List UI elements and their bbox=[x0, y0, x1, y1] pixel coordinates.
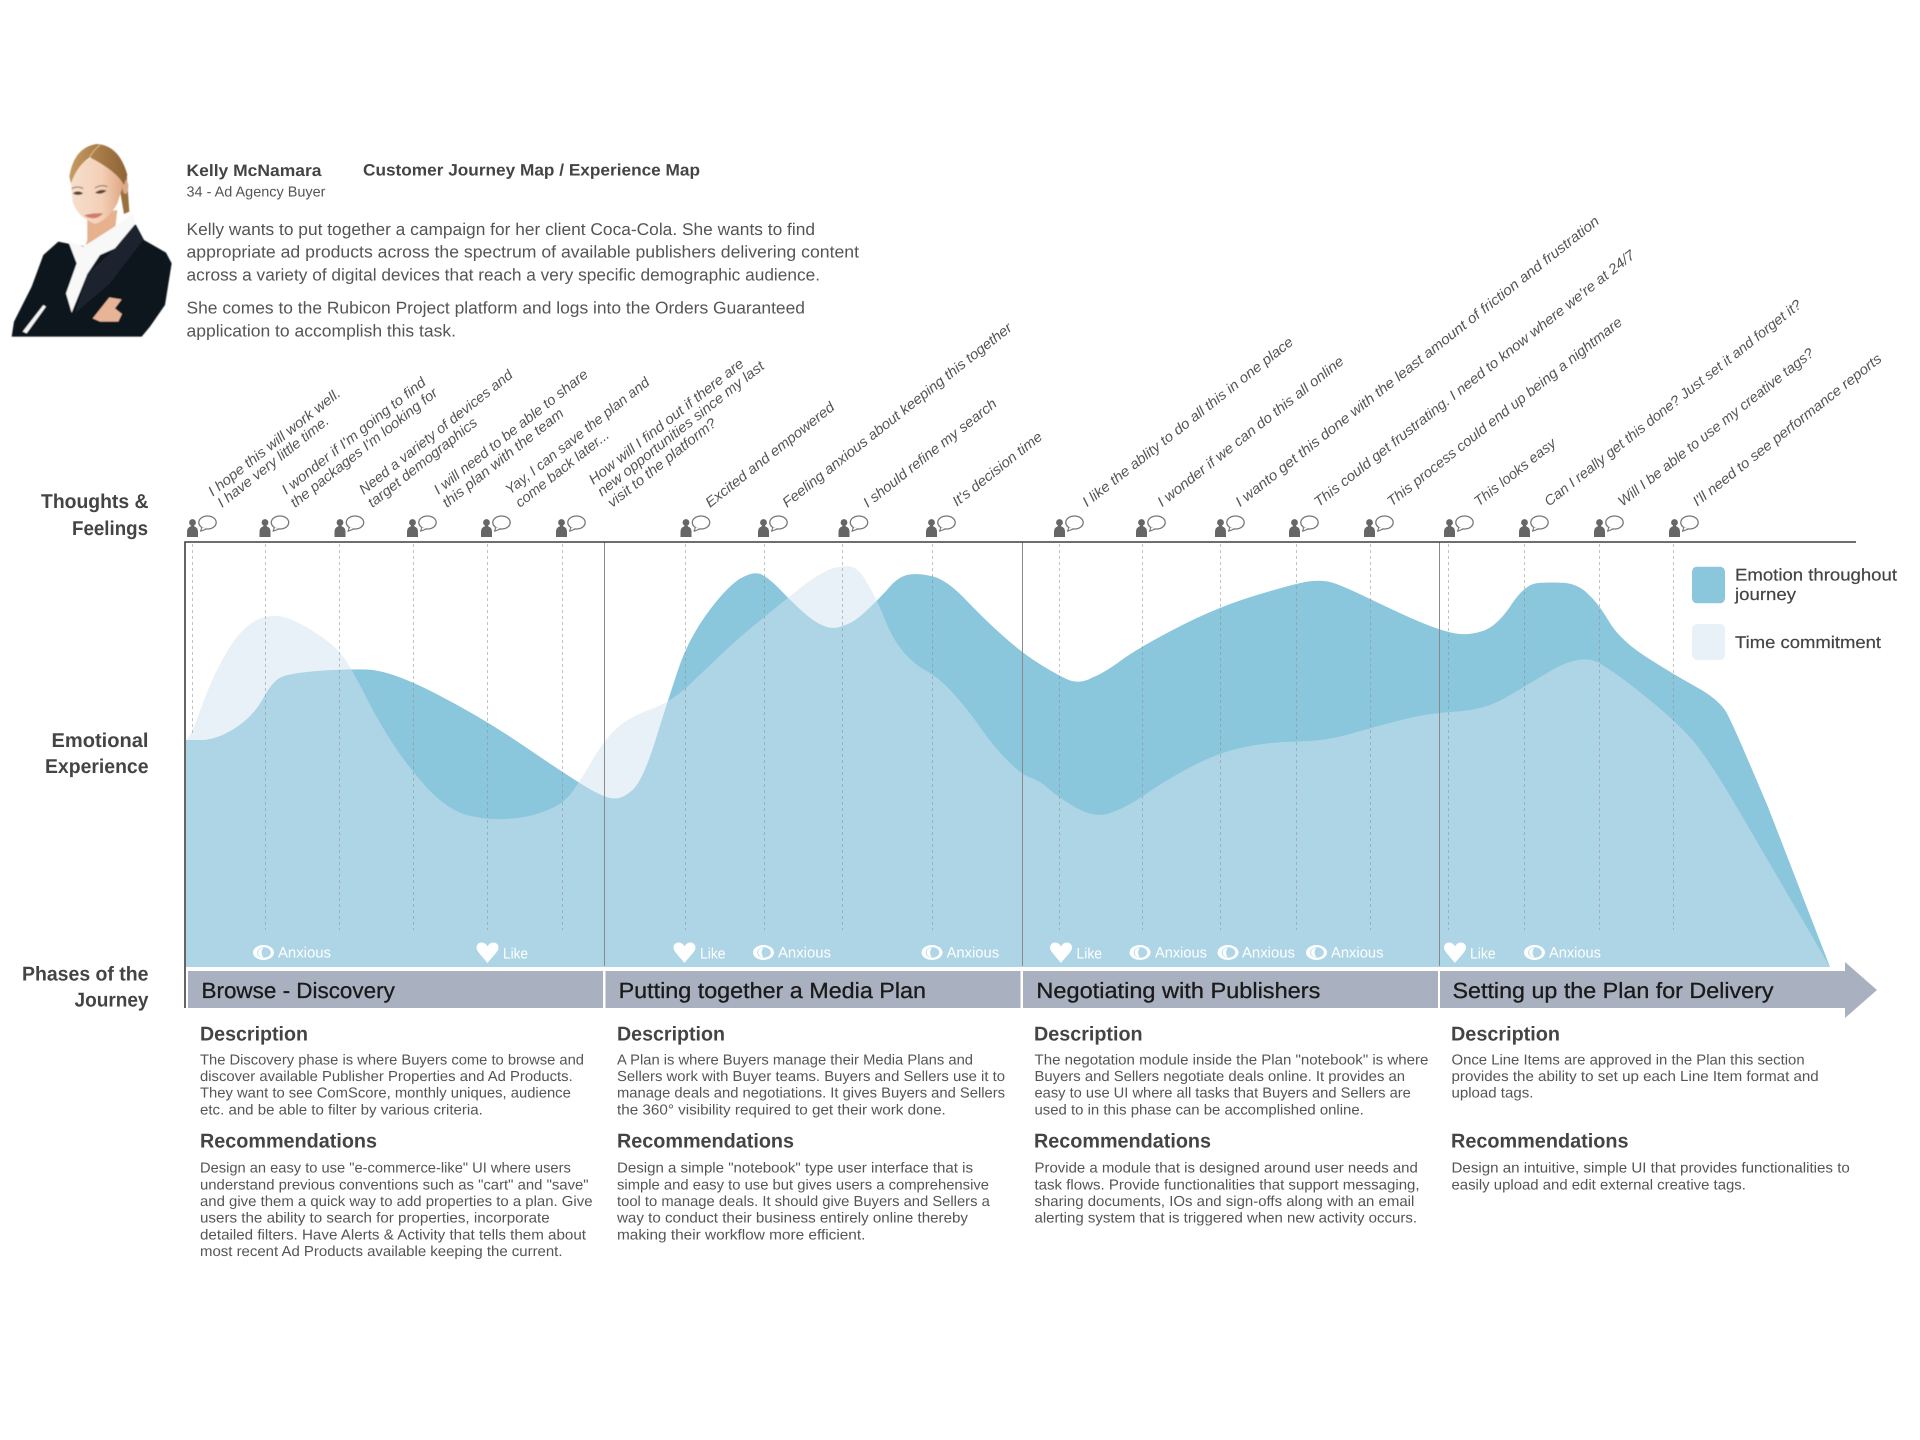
column: negotiating details: The negotation module inside the Plan "notebook" is where bbox=[1034, 1052, 1428, 1068]
rotated thoughts and feelings statements: Feeling anxious about keeping this together bbox=[780, 319, 1017, 511]
column: media plan details: Recommendations bbox=[617, 1130, 794, 1152]
row label: thoughts and feelings: Feelings bbox=[72, 518, 148, 540]
column: delivery details: Recommendations bbox=[1451, 1130, 1628, 1152]
rotated thoughts and feelings statements: the packages I'm looking for bbox=[288, 384, 442, 511]
phase: browse: Browse - Discovery bbox=[202, 978, 395, 1003]
rotated thoughts and feelings statements: I wonder if I'm going to find bbox=[279, 374, 430, 498]
rotated thoughts and feelings statements: Can I really get this done? Just set it and forget it? bbox=[1542, 297, 1805, 510]
emotion markers along the chart base: Anxious bbox=[1242, 945, 1295, 962]
row label: thoughts and feelings bbox=[41, 491, 148, 540]
column: browse discovery details: and give them a quick way to add properties to a plan. Give bbox=[200, 1194, 592, 1210]
column: media plan details: making their workflow more efficient. bbox=[617, 1227, 865, 1243]
column: browse discovery details: etc. and be able to filter by various criteria. bbox=[200, 1102, 483, 1118]
column: negotiating details: Buyers and Sellers negotiate deals online. It provides an bbox=[1034, 1069, 1405, 1085]
rotated thoughts and feelings statements: I hope this will work well. bbox=[205, 386, 344, 500]
phase dividers bbox=[604, 542, 1440, 966]
column: delivery details: upload tags. bbox=[1452, 1086, 1533, 1102]
column: delivery details: Design an intuitive, simple UI that provides functionalities to bbox=[1452, 1161, 1850, 1177]
rotated thoughts and feelings statements: It's decision time bbox=[950, 429, 1046, 510]
column: browse discovery details: users the ability to search for properties, incorporate bbox=[200, 1211, 550, 1227]
row label: phases of the journey bbox=[22, 964, 149, 1012]
phase bar with arrow bbox=[188, 962, 1877, 1018]
row label: thoughts and feelings: Thoughts & bbox=[41, 491, 148, 513]
row label: emotional experience: Experience bbox=[45, 756, 148, 778]
persona scenario text: appropriate ad products across the spectrum of available publishers delivering content bbox=[186, 243, 859, 262]
persona scenario text: She comes to the Rubicon Project platform and logs into the Orders Guaranteed bbox=[186, 299, 805, 318]
phase: negotiating: Negotiating with Publishers bbox=[1036, 978, 1320, 1003]
emotion markers along the chart base: Like bbox=[700, 946, 726, 962]
emotion markers along the chart base bbox=[253, 942, 1601, 963]
emotion markers along the chart base: Anxious bbox=[778, 945, 831, 962]
column: negotiating details: task flows. Provide functionalities that support messaging, bbox=[1034, 1177, 1420, 1193]
column: browse discovery details bbox=[200, 1024, 592, 1260]
emotion markers along the chart base: Anxious bbox=[278, 945, 331, 962]
row label: phases of the journey: Phases of the bbox=[22, 964, 148, 986]
persona scenario text: application to accomplish this task. bbox=[186, 322, 456, 341]
persona scenario text bbox=[186, 220, 859, 341]
legend swatch: time commitment bbox=[1692, 624, 1725, 660]
rotated thoughts and feelings statements: I will need to be able to share bbox=[431, 367, 592, 498]
rotated thoughts and feelings statements: I'll need to see performance reports bbox=[1690, 351, 1885, 510]
column: negotiating details: alerting system that is triggered when new activity occurs. bbox=[1034, 1211, 1417, 1227]
column: browse discovery details: Design an easy to use "e-commerce-like" UI where users bbox=[200, 1161, 571, 1177]
rotated thoughts and feelings statements: new opportunities since my last bbox=[595, 358, 769, 500]
rotated thoughts and feelings statements: target demographics bbox=[365, 415, 481, 511]
rotated thoughts and feelings statements: Yay, I can save the plan and bbox=[503, 374, 654, 498]
column: delivery details: Once Line Items are approved in the Plan this section bbox=[1452, 1052, 1805, 1068]
rotated thoughts and feelings statements: I wanto get this done with the least amount of friction and frustration bbox=[1233, 213, 1603, 510]
time commitment area bbox=[186, 566, 1830, 967]
column: negotiating details: Description bbox=[1034, 1024, 1143, 1046]
column: media plan details: Design a simple "notebook" type user interface that is bbox=[617, 1161, 973, 1177]
emotion markers along the chart base: Anxious bbox=[947, 945, 999, 962]
rotated thoughts and feelings statements: Need a variety of devices and bbox=[356, 367, 517, 498]
legend swatch: emotion bbox=[1692, 567, 1725, 603]
rotated thoughts and feelings statements: This process could end up being a nightmare bbox=[1384, 314, 1626, 510]
column: browse discovery details: Description bbox=[200, 1024, 308, 1046]
touchpoint guide lines bbox=[192, 544, 1674, 930]
emotion area chart bbox=[185, 542, 1856, 1008]
rotated thoughts and feelings statements: I should refine my search bbox=[860, 396, 1000, 511]
legend text: emotion bbox=[1734, 566, 1897, 604]
title: Customer Journey Map / Experience Map bbox=[363, 162, 700, 180]
column: negotiating details: easy to use UI where all tasks that Buyers and Sellers are bbox=[1034, 1086, 1411, 1102]
rotated thoughts and feelings statements bbox=[205, 213, 1885, 511]
row label: phases of the journey: Journey bbox=[74, 990, 149, 1012]
column: browse discovery details: Recommendations bbox=[200, 1130, 377, 1152]
rotated thoughts and feelings statements: This looks easy bbox=[1471, 435, 1560, 510]
emotion markers along the chart base: Like bbox=[503, 946, 528, 962]
rotated thoughts and feelings statements: come back later... bbox=[513, 427, 613, 511]
legend text: time commitment: Time commitment bbox=[1735, 633, 1881, 652]
legend text: emotion: journey bbox=[1734, 585, 1797, 604]
phase: delivery with arrow head: Setting up the Plan for Delivery bbox=[1452, 978, 1774, 1003]
rotated thoughts and feelings statements: visit to the platform? bbox=[605, 415, 720, 511]
phase: media plan: Putting together a Media Plan bbox=[619, 978, 926, 1003]
rotated thoughts and feelings statements: I have very little time. bbox=[215, 413, 332, 511]
persona scenario text: Kelly wants to put together a campaign for her client Coca-Cola. She wants to find bbox=[186, 220, 815, 239]
emotion markers along the chart base: Like bbox=[1470, 946, 1496, 962]
column: negotiating details: used to in this phase can be accomplished online. bbox=[1034, 1102, 1364, 1118]
column: delivery details: Description bbox=[1451, 1024, 1560, 1046]
column: browse discovery details: detailed filters. Have Alerts & Activity that tells them about bbox=[200, 1227, 586, 1243]
rotated thoughts and feelings statements: I wonder if we can do this all online bbox=[1155, 353, 1347, 510]
column: media plan details: Description bbox=[617, 1024, 725, 1046]
emotion markers along the chart base: Anxious bbox=[1155, 945, 1207, 962]
phase: negotiating bbox=[1023, 971, 1438, 1008]
column: delivery details: provides the ability to set up each Line Item format and bbox=[1452, 1069, 1819, 1085]
column: media plan details: way to conduct their business entirely online thereby bbox=[616, 1211, 969, 1227]
rotated thoughts and feelings statements: I like the ablity to do all this in one place bbox=[1080, 334, 1297, 510]
chart axes bbox=[185, 542, 1856, 1008]
header: persona name: Kelly McNamara bbox=[186, 162, 322, 180]
rotated thoughts and feelings statements: Excited and empowered bbox=[703, 399, 839, 511]
emotion throughout journey area bbox=[186, 573, 1830, 967]
column: media plan details: A Plan is where Buyers manage their Media Plans and bbox=[617, 1052, 973, 1068]
rotated thoughts and feelings statements: This could get frustrating. I need to know where we're at 24/7 bbox=[1311, 247, 1639, 510]
row of person and speech bubble icons bbox=[187, 516, 1698, 537]
column: browse discovery details: discover available Publisher Properties and Ad Products. bbox=[200, 1069, 573, 1085]
persona scenario text: across a variety of digital devices that reach a very specific demographic audience. bbox=[186, 265, 820, 284]
persona photo bbox=[12, 144, 172, 337]
column: media plan details: tool to manage deals. It should give Buyers and Sellers a bbox=[617, 1194, 991, 1210]
column: negotiating details: sharing documents, IOs and sign-offs along with an email bbox=[1034, 1194, 1414, 1210]
rotated thoughts and feelings statements: this plan with the team bbox=[440, 406, 567, 511]
column: media plan details: simple and easy to use but gives users a comprehensive bbox=[617, 1177, 989, 1193]
legend text: emotion: Emotion throughout bbox=[1735, 566, 1897, 585]
emotion markers along the chart base: Like bbox=[1076, 946, 1102, 962]
column: media plan details bbox=[616, 1024, 1005, 1243]
column: browse discovery details: They want to see ComScore, monthly uniques, audience bbox=[200, 1086, 571, 1102]
column: media plan details: the 360° visibility required to get their work done. bbox=[617, 1102, 946, 1118]
emotion markers along the chart base: Anxious bbox=[1331, 945, 1384, 962]
row label: emotional experience bbox=[45, 730, 148, 778]
column: delivery details: easily upload and edit external creative tags. bbox=[1452, 1177, 1746, 1193]
column: browse discovery details: most recent Ad Products available keeping the current. bbox=[200, 1244, 562, 1260]
emotion markers along the chart base: Anxious bbox=[1549, 945, 1601, 962]
column: negotiating details bbox=[1034, 1024, 1428, 1227]
phase: delivery with arrow head bbox=[1440, 962, 1877, 1018]
column: media plan details: manage deals and negotiations. It gives Buyers and Sellers bbox=[617, 1086, 1005, 1102]
rotated thoughts and feelings statements: How will I find out if there are bbox=[586, 356, 747, 488]
column: negotiating details: Recommendations bbox=[1034, 1130, 1211, 1152]
column: negotiating details: Provide a module that is designed around user needs and bbox=[1034, 1161, 1418, 1177]
column: browse discovery details: The Discovery phase is where Buyers come to browse and bbox=[200, 1052, 584, 1068]
column: delivery details bbox=[1451, 1024, 1850, 1193]
column: media plan details: Sellers work with Buyer teams. Buyers and Sellers use it to bbox=[617, 1069, 1005, 1085]
phase: browse bbox=[188, 971, 603, 1008]
column: browse discovery details: understand previous conventions such as "cart" and "save" bbox=[200, 1177, 589, 1193]
phase: media plan bbox=[606, 971, 1020, 1008]
persona role: 34 - Ad Agency Buyer bbox=[186, 184, 326, 200]
rotated thoughts and feelings statements: Will I be able to use my creative tags? bbox=[1615, 345, 1817, 510]
row label: emotional experience: Emotional bbox=[52, 730, 148, 752]
legend bbox=[1692, 566, 1897, 660]
